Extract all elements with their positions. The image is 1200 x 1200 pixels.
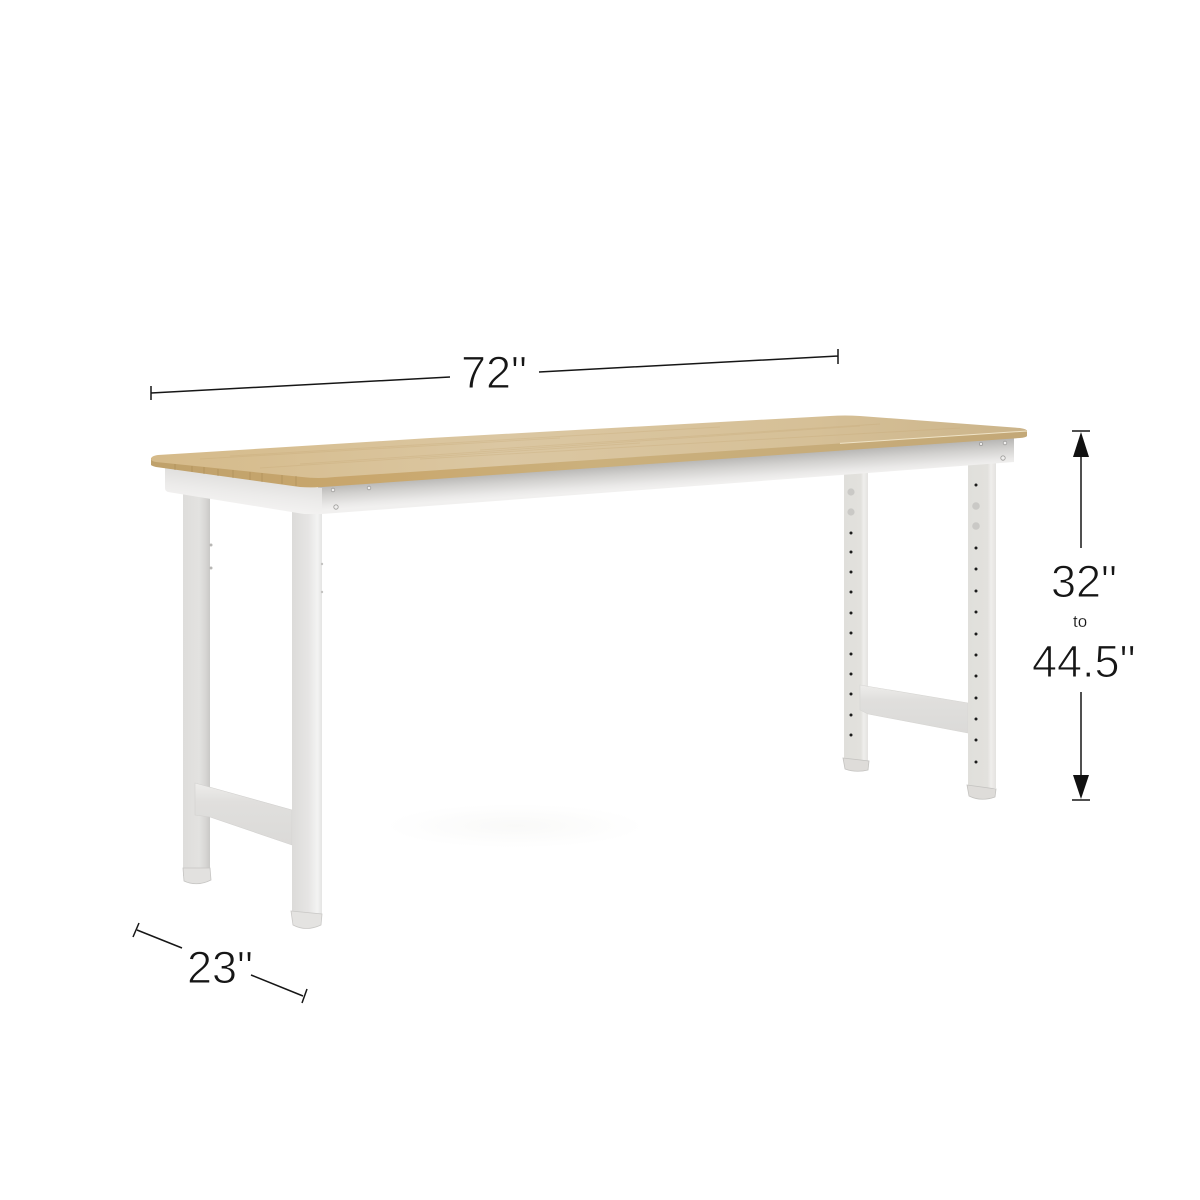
dimension: width 72 inches xyxy=(151,347,838,400)
adjustment holes: back right leg xyxy=(850,532,852,736)
tabletop xyxy=(151,416,1027,487)
apron short side xyxy=(165,466,322,514)
workbench xyxy=(151,416,1027,928)
height maximum label: 44.5" xyxy=(1032,636,1136,687)
dimension: depth 23 inches xyxy=(133,923,307,1003)
bottom arrow xyxy=(1072,692,1090,800)
apron long side xyxy=(318,438,1014,514)
tabletop front edge xyxy=(151,430,1027,487)
right crossbar xyxy=(860,685,968,733)
bolts xyxy=(331,441,1007,509)
dimension: width 72 inches: 72" xyxy=(461,347,527,398)
front edge highlight xyxy=(840,431,1027,443)
dimension: height 32 to 44.5 inches xyxy=(1032,431,1136,800)
apron frame xyxy=(165,438,1014,514)
bamboo edge strips xyxy=(175,464,296,486)
adjustment holes: front right leg xyxy=(974,484,978,764)
top arrow xyxy=(1072,431,1090,548)
dimension: depth 23 inches: 23" xyxy=(187,942,253,993)
wood grain xyxy=(200,424,960,468)
height minimum label: 32" xyxy=(1051,556,1117,607)
left crossbar xyxy=(195,783,292,845)
floor shadow xyxy=(385,804,645,848)
back right leg xyxy=(843,465,869,771)
to label: to xyxy=(1073,612,1087,631)
back left leg xyxy=(183,490,212,884)
front left leg xyxy=(291,508,323,928)
tabletop surface xyxy=(151,416,1027,478)
front right leg xyxy=(967,455,996,799)
